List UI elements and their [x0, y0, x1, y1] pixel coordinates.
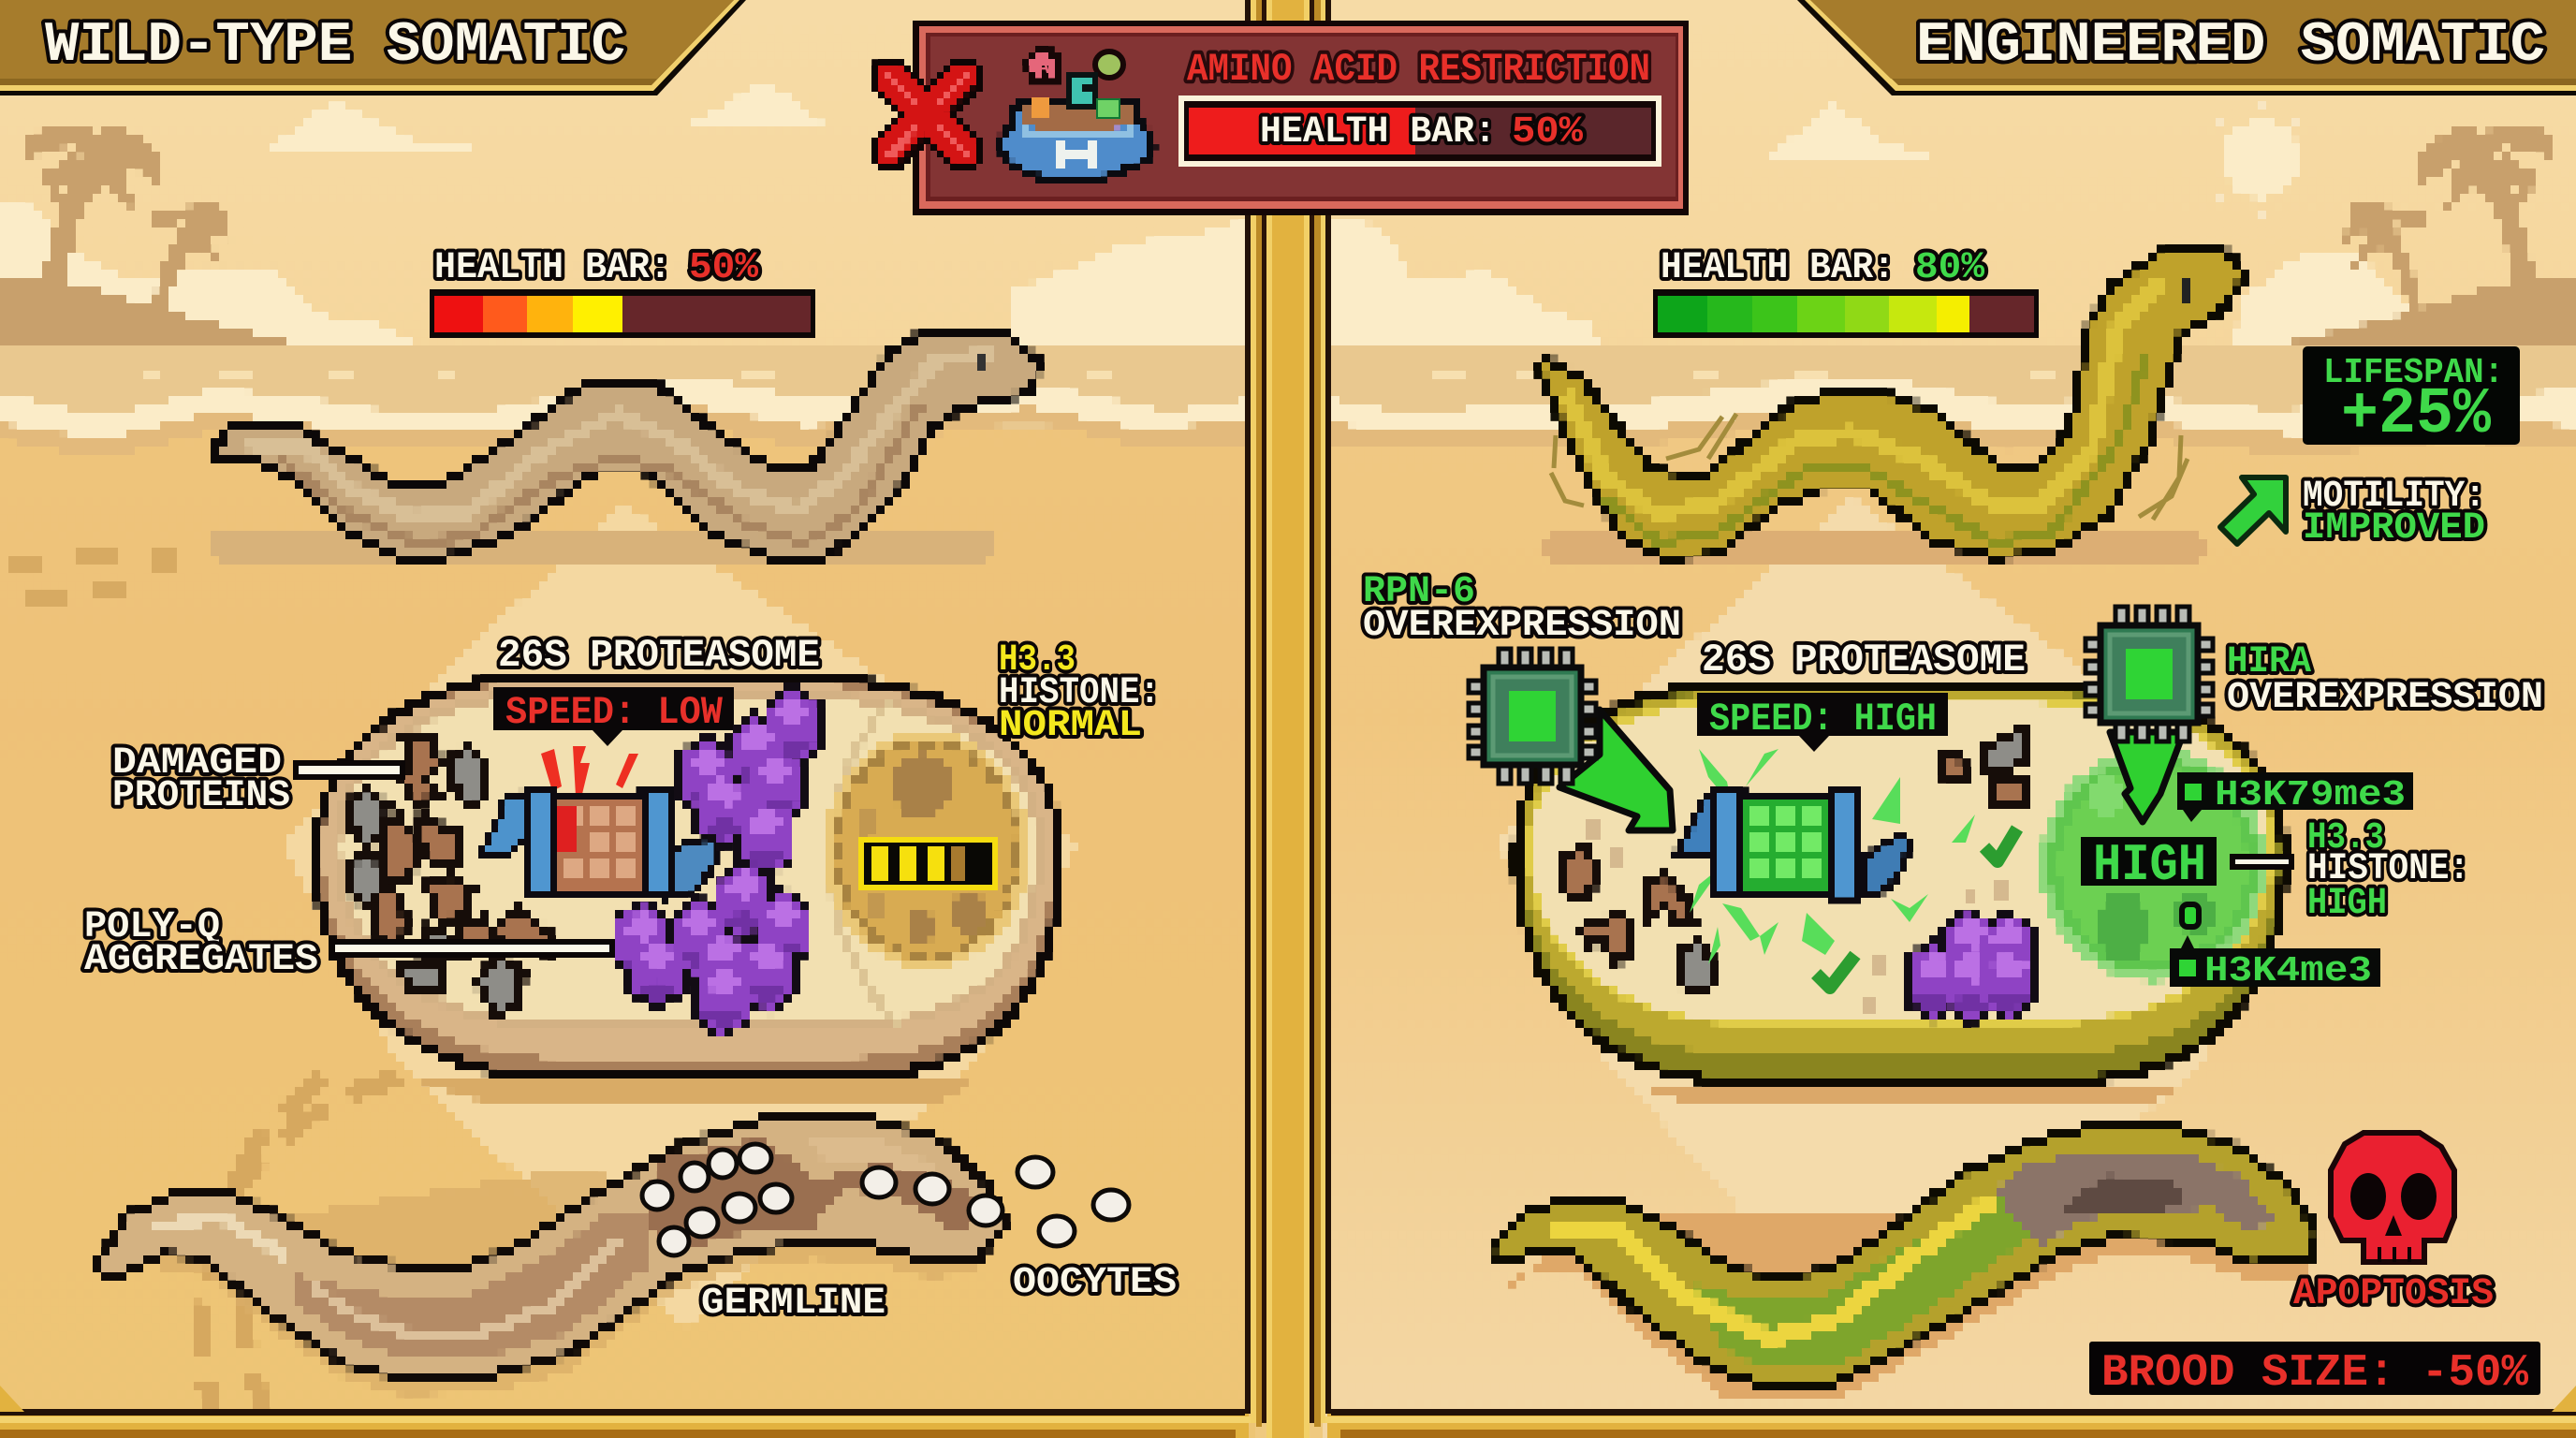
- label: H3.3 histone normal: [999, 639, 1160, 747]
- label: H3.3 histone high: HIGH: [2307, 883, 2387, 925]
- worm: wild-type adult: [211, 338, 1031, 562]
- label: H3.3 histone high: H3.3: [2307, 817, 2384, 859]
- label: damaged proteins: [112, 742, 402, 817]
- icon: checkmarks: [1816, 829, 2017, 988]
- bowl body: [1000, 105, 1153, 181]
- title: wild-type somatic: WILD-TYPE SOMATIC: [45, 14, 625, 78]
- value: 50%: 50%: [1512, 111, 1584, 154]
- heading: amino acid restriction: AMINO ACID RESTRICTION: [1187, 47, 1650, 92]
- label: nucleus high: HIGH: [2093, 835, 2206, 895]
- icon: red cross: [882, 69, 972, 157]
- label: damaged proteins: PROTEINS: [112, 775, 290, 817]
- nucleus: high: [2044, 753, 2261, 977]
- label: nucleus high: [2081, 835, 2291, 895]
- label: HIRA overexpression: [2227, 641, 2543, 719]
- callout: lifespan +25%: [2303, 346, 2520, 452]
- label: H3.3 histone normal: HISTONE:: [999, 672, 1160, 714]
- icon: up arrow: [2220, 477, 2286, 544]
- icon: nucleus marker: [2182, 904, 2199, 927]
- cell: engineered somatic: [1363, 571, 2543, 1103]
- label: poly-q aggregates: [84, 906, 612, 981]
- label: 26S proteasome: 26S PROTEASOME: [498, 633, 820, 678]
- health bar: wild-type 50%: [430, 247, 815, 338]
- tag: H3K4me3: H3K4me3: [2204, 951, 2372, 991]
- label: poly-q aggregates: AGGREGATES: [84, 939, 318, 981]
- arrow: rpn-6 to proteasome: [1559, 710, 1673, 830]
- label: apoptosis: APOPTOSIS: [2293, 1273, 2494, 1315]
- cell body: [316, 677, 1060, 1103]
- title: engineered somatic: ENGINEERED SOMATIC: [1916, 14, 2545, 78]
- motion lines: [1551, 414, 2188, 520]
- poly-q aggregates upper: [682, 688, 817, 875]
- oocytes in germline: [642, 1144, 1003, 1255]
- label: motility: MOTILITY:: [2303, 476, 2485, 518]
- nucleus: [828, 736, 1025, 964]
- label: HIRA overexpression: HIRA: [2227, 641, 2311, 683]
- label: HIRA overexpression: OVEREXPRESSION: [2227, 677, 2543, 719]
- label: poly-q aggregates: POLY-Q: [84, 906, 220, 948]
- released oocytes: [1017, 1157, 1129, 1246]
- icon: amino acid pellet: [1095, 51, 1123, 78]
- label: H3.3 histone normal: H3.3: [999, 639, 1076, 682]
- poly-q aggregates reduced: [1909, 912, 2032, 1020]
- debris flecks: [1586, 819, 2009, 1014]
- icon: food bowl: [1000, 51, 1153, 181]
- label: oocytes: OOCYTES: [1013, 1262, 1177, 1304]
- label: health bar: HEALTH BAR:: [1661, 247, 1895, 289]
- tag: H3K79me3: [2177, 772, 2413, 822]
- label: speed high: SPEED: HIGH: [1709, 697, 1937, 741]
- label: damaged proteins: DAMAGED: [112, 742, 282, 785]
- proteasome: low speed: [480, 788, 714, 899]
- debris: [1561, 726, 2027, 992]
- worm: engineered germline failure: [1498, 1133, 2540, 1401]
- callout: brood size -50%: BROOD SIZE: -50%: [2101, 1348, 2528, 1399]
- health bar: engineered 80%: [1653, 247, 2039, 338]
- callout: motility improved: [2220, 476, 2485, 550]
- proteasome: high speed: [1674, 791, 1912, 898]
- icon: bone on bowl: [1056, 140, 1097, 169]
- icon: amino acid letter: A: [1037, 56, 1050, 80]
- icon: hira chip: [2086, 607, 2213, 741]
- icon: rpn-6 chip: [1469, 649, 1596, 784]
- cell: wild-type somatic: [84, 633, 1160, 1103]
- icon: amino acid E: [1069, 75, 1096, 107]
- label: speed high: [1697, 693, 1948, 752]
- health bar: restricted 50%: [1178, 95, 1661, 167]
- histone gauge: [858, 837, 998, 890]
- poly-q aggregates lower: [617, 863, 805, 1034]
- icon: amino acid A: [1028, 51, 1060, 79]
- worm: wild-type germline: [103, 1125, 1177, 1395]
- cell body: [1516, 686, 2284, 1103]
- damaged proteins cluster: [348, 735, 552, 1016]
- label: H3.3 histone high: [2307, 817, 2469, 925]
- panel: wild-type somatic background: [0, 0, 1254, 1438]
- worm: engineered adult: [1544, 259, 2237, 565]
- label: H3.3 histone high: HISTONE:: [2307, 848, 2469, 890]
- value: +25%: +25%: [2341, 378, 2492, 452]
- label: RPN-6 overexpression: [1363, 571, 1681, 647]
- value: improved: IMPROVED: [2303, 507, 2485, 550]
- arrow: hira to nucleus: [2110, 732, 2184, 822]
- icon: red sparks: [541, 746, 638, 796]
- worm body: [1498, 1133, 2312, 1401]
- label: lifespan: LIFESPAN:: [2323, 353, 2504, 393]
- icon: red skull: [2331, 1133, 2454, 1262]
- label: germline: GERMLINE: [701, 1283, 886, 1325]
- tag: H3K79me3: H3K79me3: [2215, 775, 2406, 815]
- value: 50%: 50%: [689, 247, 759, 289]
- label: speed low: SPEED: LOW: [505, 690, 724, 735]
- panel: engineered somatic background: [1324, 0, 2576, 1438]
- banner: engineered somatic: [1797, 0, 2576, 95]
- label: H3.3 histone normal: NORMAL: [999, 705, 1142, 747]
- panel: amino acid restriction: [882, 21, 1689, 215]
- tag: H3K4me3: [2170, 935, 2380, 991]
- label: health bar: HEALTH BAR:: [1260, 111, 1496, 154]
- value: 80%: 80%: [1915, 247, 1985, 289]
- label: 26S proteasome: 26S PROTEASOME: [1702, 638, 2026, 682]
- label: health bar: HEALTH BAR:: [434, 247, 671, 289]
- label: RPN-6 overexpression: RPN-6: [1363, 571, 1475, 613]
- green energy sparks: [1690, 749, 1975, 964]
- label: RPN-6 overexpression: OVEREXPRESSION: [1363, 605, 1681, 647]
- banner: wild-type somatic: [0, 0, 746, 95]
- worm body: [103, 1125, 998, 1395]
